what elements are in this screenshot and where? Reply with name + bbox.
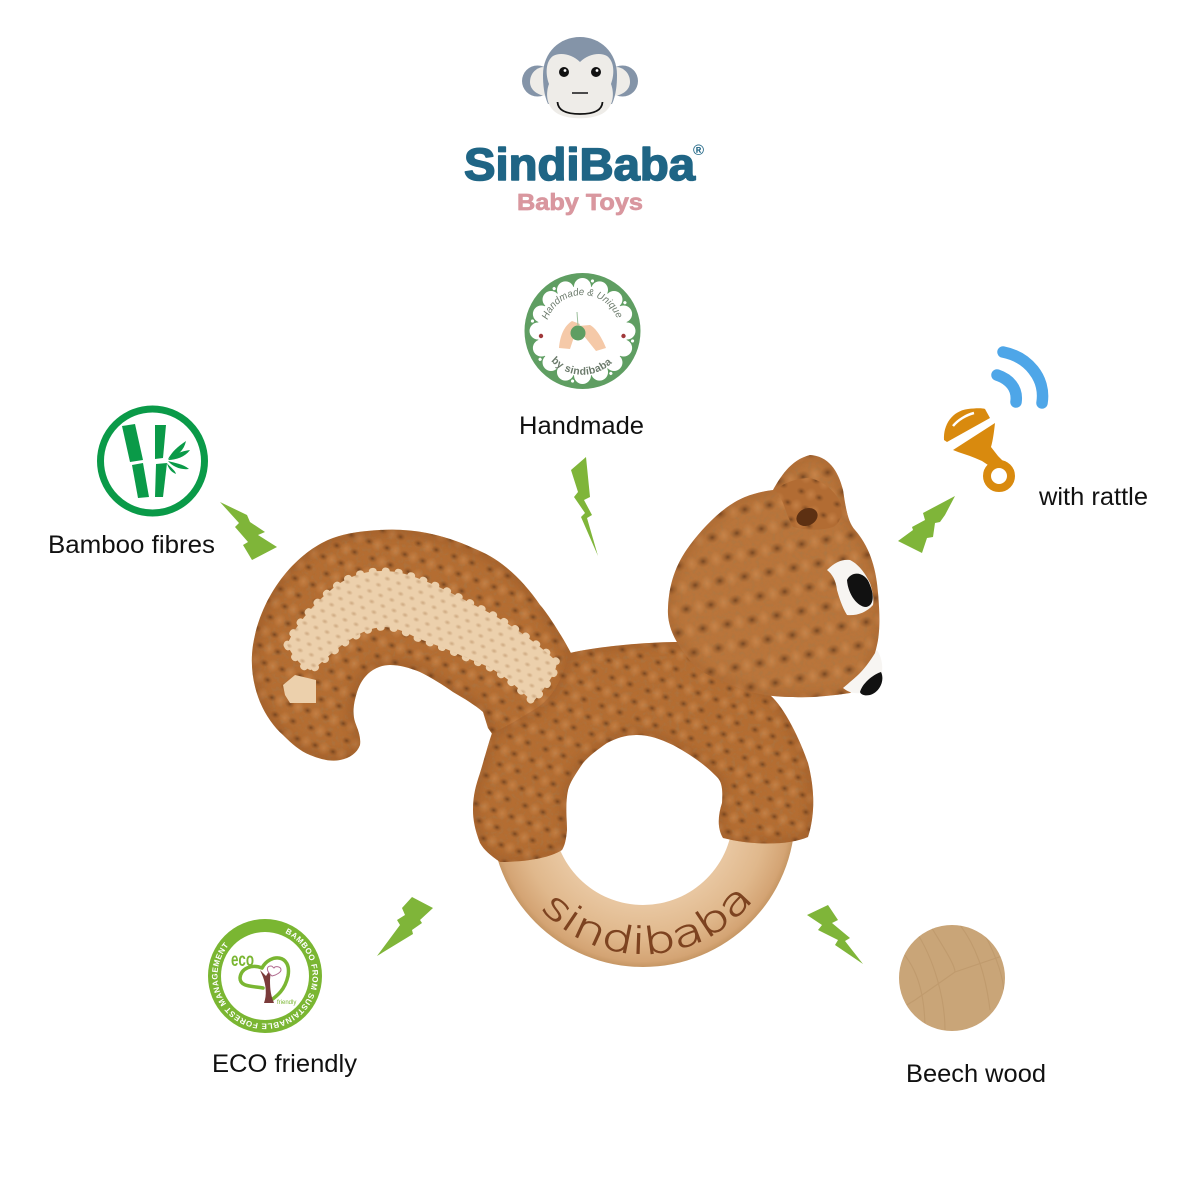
badge word: friendly: friendly bbox=[277, 1000, 296, 1006]
badge: eco friendly bamboo bbox=[208, 919, 322, 1033]
wordmark: SindiBaba: SindiBaba bbox=[464, 139, 696, 190]
icon: crocheting hands bbox=[559, 312, 606, 351]
squirrel body bbox=[473, 642, 814, 862]
registered mark: ® bbox=[693, 142, 704, 159]
tail stripe tip bbox=[283, 675, 316, 703]
arrow: lightning from handmade bbox=[571, 457, 598, 556]
squirrel tail bbox=[252, 530, 571, 761]
squirrel head bbox=[668, 455, 882, 698]
arrow: lightning from beech wood bbox=[807, 905, 863, 964]
swatch: beech wood bbox=[895, 925, 1005, 1031]
label: Beech wood: Beech wood bbox=[906, 1060, 1046, 1088]
label: Handmade: Handmade bbox=[519, 412, 644, 440]
eco heart tree bbox=[240, 958, 288, 1003]
badge: handmade and unique bbox=[524, 273, 640, 389]
label: ECO friendly: ECO friendly bbox=[212, 1050, 358, 1078]
label: Bamboo fibres: Bamboo fibres bbox=[48, 531, 215, 559]
product: crochet squirrel teether bbox=[246, 455, 882, 989]
tagline: Baby Toys: Baby Toys bbox=[517, 189, 643, 215]
badge text: Handmade & Unique: Handmade & Unique bbox=[542, 288, 622, 320]
wooden ring bbox=[498, 840, 793, 967]
label: with rattle: with rattle bbox=[1038, 483, 1148, 511]
icon: small hearts bbox=[539, 334, 626, 338]
icon: bamboo fibres badge bbox=[100, 409, 204, 513]
icon: rattle toy bbox=[944, 408, 1011, 488]
logo: SindiBaba monkey and wordmark bbox=[464, 37, 704, 215]
tail stripe bbox=[280, 565, 565, 710]
icon: monkey head bbox=[522, 37, 638, 118]
eye bbox=[827, 560, 873, 615]
badge ring text: BAMBOO FROM SUSTAINABLE FOREST MANAGEMENT bbox=[212, 928, 318, 1030]
nose bbox=[843, 650, 882, 695]
badge word: eco: eco bbox=[231, 950, 254, 971]
icon: sound waves bbox=[997, 352, 1043, 403]
ear bbox=[775, 478, 842, 530]
arrow: lightning from rattle bbox=[898, 496, 955, 553]
icon: rattle with sound waves bbox=[944, 352, 1043, 488]
badge text: by sindibaba: by sindibaba bbox=[552, 356, 612, 375]
engraved text: sindibaba: sindibaba bbox=[542, 892, 751, 954]
arrow: lightning to tail bbox=[220, 502, 277, 560]
arrow: lightning from eco badge bbox=[377, 897, 433, 956]
